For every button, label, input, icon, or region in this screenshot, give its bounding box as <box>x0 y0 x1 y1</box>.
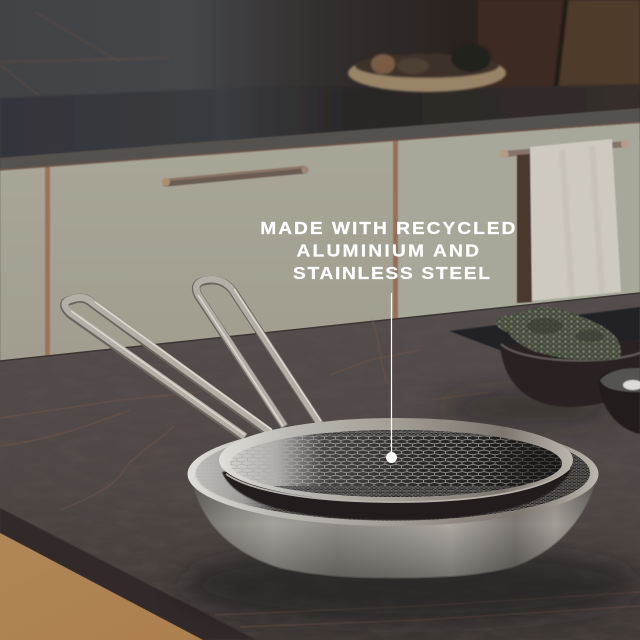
cooktop <box>449 307 640 352</box>
countertop <box>0 290 640 640</box>
bread tray <box>348 44 506 92</box>
counter edge of back unit <box>0 108 640 170</box>
marble veins <box>0 320 640 627</box>
callout leader line <box>390 293 392 457</box>
small salt bowl <box>598 367 640 434</box>
large pan interior hex coating <box>195 453 590 520</box>
callout heading: STAINLESS STEEL <box>293 263 490 283</box>
towel rail <box>500 140 629 158</box>
back counter surface <box>0 84 640 158</box>
herb bowl <box>500 340 640 407</box>
small pan honeycomb coating <box>230 430 562 497</box>
large pan body <box>192 480 596 578</box>
cabinets <box>0 122 640 364</box>
wall and backsplash <box>0 0 640 140</box>
pan shadow <box>180 547 640 623</box>
small pan <box>219 418 573 521</box>
counter front edge <box>0 508 257 640</box>
cabinet handle left <box>162 166 308 186</box>
large pan <box>188 422 598 578</box>
callout dot <box>386 452 397 463</box>
callout heading: ALUMINIUM AND <box>296 240 479 260</box>
small pan rim <box>219 418 573 502</box>
callout heading: MADE WITH RECYCLED <box>260 218 515 238</box>
towel <box>517 139 621 303</box>
small pan front rim highlight <box>226 468 570 502</box>
wooden board leaning on wall <box>478 0 640 92</box>
wood front panel <box>0 533 203 640</box>
small pan outer body <box>222 450 572 520</box>
handle of large pan <box>64 297 272 438</box>
thyme herbs <box>496 307 621 360</box>
handle of small pan <box>196 279 321 427</box>
large pan body shading <box>192 480 596 578</box>
bowl shadow <box>440 394 620 422</box>
small pan interior <box>230 430 562 497</box>
large pan interior <box>196 426 590 520</box>
large pan rim <box>188 422 598 526</box>
